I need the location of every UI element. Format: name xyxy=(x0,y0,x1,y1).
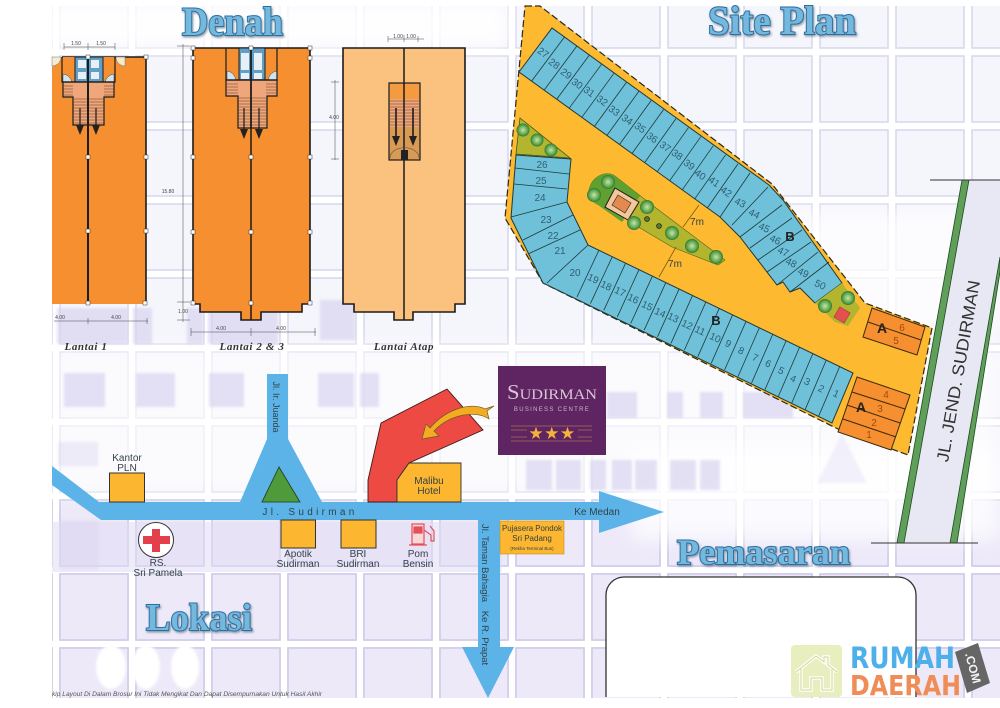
road: Jl. Jend. Sudirman: JL. JEND. SUDIRMAN xyxy=(933,279,984,463)
floor plan: Lantai 1: 4.00 xyxy=(111,315,121,321)
floor plan: Lantai 2 & 3: 4.00 xyxy=(216,326,226,332)
site plan xyxy=(505,6,932,455)
building: Pajasera Pondok Sri Padang xyxy=(500,521,564,554)
lots 27-50: 27 xyxy=(535,46,551,61)
icon: petrol pump xyxy=(409,524,434,545)
label: Ke R. Prapat: Ke R. Prapat xyxy=(479,611,490,666)
road: Jl. Jend. Sudirman xyxy=(871,180,1000,543)
floor plan: Lantai 1: 1.50 xyxy=(71,41,81,47)
location map xyxy=(52,366,664,698)
central garden xyxy=(587,174,725,265)
lots 27-50: 37 xyxy=(657,140,673,155)
icon: house xyxy=(791,645,842,697)
building: Malibu Hotel: Hotel xyxy=(417,486,441,497)
dimension: 7m xyxy=(659,205,704,277)
landmark: green triangle xyxy=(262,467,300,502)
lots 27-50: 35 xyxy=(632,121,648,136)
road: Jl. Taman Bahagia with arrow xyxy=(462,520,514,698)
label: RS. Sri Pamela: Sri Pamela xyxy=(134,568,183,579)
logo: Sudirman Business Centre: BUSINESS CENTRE xyxy=(514,407,590,413)
label: Lantai Atap: Lantai Atap xyxy=(373,341,434,353)
lots 27-50 xyxy=(519,28,842,303)
building: Pajasera Pondok Sri Padang: (Rekha Terminal Bus) xyxy=(510,546,554,551)
lots 27-50: 34 xyxy=(619,113,635,128)
lots 1-26: 9 xyxy=(723,338,733,351)
building: Kantor PLN: Kantor xyxy=(112,453,142,464)
lots 27-50: 31 xyxy=(581,85,597,100)
block A: lots 1-4: A xyxy=(856,399,866,415)
lots 1-26: 8 xyxy=(736,345,746,358)
floor plan: Lantai Atap: 1.00 xyxy=(406,34,416,40)
block A: lots 1-4: 2 xyxy=(871,418,877,429)
lots 27-50: 39 xyxy=(681,158,697,173)
tag: .COM xyxy=(955,643,990,693)
lots 27-50: 46 xyxy=(767,233,783,248)
lots 1-26: 2 xyxy=(816,383,826,396)
lots 1-26: 10 xyxy=(707,331,723,346)
lots 1-26: 19 xyxy=(585,272,601,287)
logo: Sudirman Business Centre: ★★★ xyxy=(528,424,576,443)
block A: lots 5-6: 6 xyxy=(899,323,905,334)
lots 27-50: 47 xyxy=(775,245,791,260)
building: Pajasera Pondok Sri Padang: Sri Padang xyxy=(512,534,552,543)
label: Pom Bensin: Bensin xyxy=(403,559,433,570)
lots 27-50: 41 xyxy=(706,175,722,190)
lots 1-26: 15 xyxy=(639,299,655,314)
floor plan: Lantai Atap xyxy=(329,34,465,320)
building: Apotik Sudirman: Sudirman xyxy=(277,559,319,570)
lots 1-26: 23 xyxy=(540,215,552,226)
lots 1-26: 1 xyxy=(831,388,841,401)
floor plan: Lantai Atap: 4.00 xyxy=(329,115,339,121)
lots 27-50: 42 xyxy=(718,185,734,200)
lots 1-26: 12 xyxy=(679,318,695,333)
floor plan: Lantai 2 & 3: 15.80 xyxy=(162,189,174,195)
label: Pom Bensin: Pom xyxy=(408,549,428,560)
lots 1-26: 22 xyxy=(547,231,559,242)
building: Malibu Hotel xyxy=(397,463,461,502)
lots 27-50: 32 xyxy=(594,94,610,109)
site boundary xyxy=(505,6,932,455)
block A: lots 5-6 xyxy=(863,308,925,355)
label: block B lower: B xyxy=(711,313,721,328)
logo: Sudirman Business Centre xyxy=(498,366,606,455)
dimension: 7m: 7m xyxy=(668,259,682,270)
label: RS. Sri Pamela: RS. xyxy=(150,558,166,569)
block A: lots 1-4: 1 xyxy=(866,430,872,441)
lots 1-26 xyxy=(511,155,853,423)
watermark: RumahDaerah.com xyxy=(791,641,990,702)
lots 1-26: 26 xyxy=(536,160,548,171)
floor plan: Lantai 1: 1.50 xyxy=(96,41,106,47)
dimension: 7m: 7m xyxy=(690,217,704,228)
lots 1-26: 25 xyxy=(535,176,547,187)
lots 1-26: 21 xyxy=(554,246,566,257)
text: DAERAH: DAERAH xyxy=(850,669,961,702)
building: Apotik Sudirman xyxy=(277,520,319,570)
lots 27-50: 45 xyxy=(756,221,772,236)
lots 27-50: 38 xyxy=(669,148,685,163)
icon: hospital cross xyxy=(138,522,174,558)
lots 1-26: 20 xyxy=(569,268,581,279)
building: Pajasera Pondok Sri Padang: Pujasera Pondok xyxy=(502,524,563,533)
panel: marketing contact box xyxy=(606,577,916,697)
block A: lots 1-4: 4 xyxy=(883,390,889,401)
building: Malibu Hotel: Malibu xyxy=(414,476,444,487)
label: Jl. Ir. Juanda: Jl. Ir. Juanda xyxy=(271,381,281,433)
label: block B upper: B xyxy=(785,229,795,244)
lots 27-50: 49 xyxy=(795,266,811,281)
block A: lots 1-4: 3 xyxy=(877,404,883,415)
heading: Pemasaran: Pemasaran xyxy=(677,532,850,572)
lots 1-26: 14 xyxy=(652,306,668,321)
lots 27-50: 29 xyxy=(558,67,574,82)
floor plan: Lantai 1: 4.00 xyxy=(55,315,65,321)
garden: left corner xyxy=(516,118,570,158)
text: RUMAH: RUMAH xyxy=(850,641,955,675)
block A: lots 1-4 xyxy=(838,377,910,450)
lots 1-26: 5 xyxy=(776,365,786,378)
lots 27-50: 48 xyxy=(783,256,799,271)
label: Lantai 2 & 3: Lantai 2 & 3 xyxy=(219,341,284,353)
lots 27-50: 40 xyxy=(692,168,708,183)
road: Jl. Sudirman with arrow to Medan xyxy=(52,374,664,533)
label: Jl. Taman Bahagia: Jl. Taman Bahagia xyxy=(479,524,490,603)
tag: .COM: .COM xyxy=(962,651,984,685)
label: Pom Bensin xyxy=(403,549,433,570)
floor plan: Lantai Atap: 1.00 xyxy=(393,34,403,40)
label: Ke Medan: Ke Medan xyxy=(574,507,620,518)
arrow: to site xyxy=(422,406,494,439)
building: Apotik Sudirman: Apotik xyxy=(284,549,313,560)
lots 27-50: 36 xyxy=(644,131,660,146)
building: Kantor PLN: PLN xyxy=(117,463,137,474)
logo: Sudirman Business Centre: SUDIRMAN xyxy=(507,380,597,404)
floor plan: Lantai 2 & 3 xyxy=(162,44,316,336)
label: Lantai 1: Lantai 1 xyxy=(64,341,108,353)
lots 1-26: 3 xyxy=(802,376,812,389)
heading: Denah: Denah xyxy=(182,0,283,44)
building: Kantor PLN xyxy=(110,453,144,502)
lots 27-50: 44 xyxy=(746,207,762,222)
building: BRI Sudirman: BRI xyxy=(350,549,366,560)
lots 27-50: 30 xyxy=(569,77,585,92)
lots 1-26: 11 xyxy=(693,324,707,339)
lots 1-26: 7 xyxy=(750,352,760,365)
lots 1-26: 16 xyxy=(625,292,641,307)
lots 1-26: 4 xyxy=(788,373,798,386)
building: BRI Sudirman: Sudirman xyxy=(337,559,379,570)
lots 1-26: 18 xyxy=(598,279,614,294)
lots 27-50: 28 xyxy=(546,57,562,72)
lots 1-26: 17 xyxy=(612,285,628,300)
site location: red block xyxy=(368,389,483,502)
building: BRI Sudirman xyxy=(337,520,379,570)
heading: Lokasi: Lokasi xyxy=(146,597,252,639)
lots 27-50: 33 xyxy=(606,104,622,119)
block A: lots 5-6: A xyxy=(877,320,887,336)
floor plan: Lantai 2 & 3: 1.00 xyxy=(178,309,188,315)
floor plan: Lantai 2 & 3: 4.00 xyxy=(276,326,286,332)
lots 1-26: 6 xyxy=(763,358,773,371)
lots 27-50: 50 xyxy=(812,278,828,293)
label: RS. Sri Pamela xyxy=(134,558,183,579)
garden near lot 50 xyxy=(815,283,860,326)
lots 1-26: 24 xyxy=(534,193,546,204)
label: Jl. Sudirman: Jl. Sudirman xyxy=(262,507,358,518)
lots 27-50: 43 xyxy=(732,196,748,211)
block A: lots 5-6: 5 xyxy=(893,336,899,347)
footnote: kip Layout Di Dalam Brosur Ini Tidak Mengikat Dan Dapat Disempurnakan Untuk Hasil Akhir xyxy=(52,692,323,698)
lots 1-26: 13 xyxy=(665,311,681,326)
floor plan: Lantai 1 xyxy=(52,41,148,324)
